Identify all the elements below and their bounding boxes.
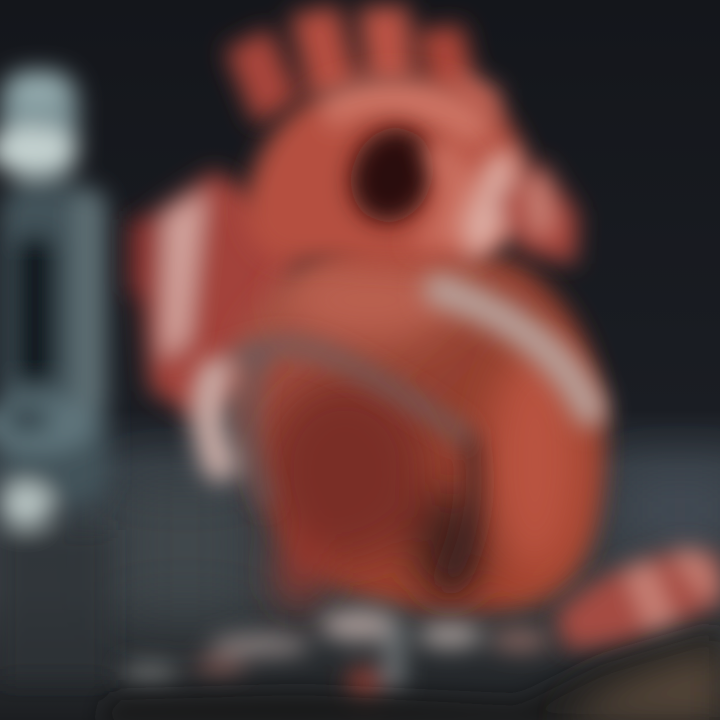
lower right vessels <box>555 548 720 648</box>
main ventricle body <box>234 242 604 610</box>
pale grey tissue bands <box>208 290 590 580</box>
scattered fragments at base <box>120 609 550 705</box>
bottle <box>0 70 110 680</box>
back vessels at top <box>225 5 500 130</box>
right vessels <box>460 150 578 265</box>
body shading <box>265 260 580 606</box>
table surface glow <box>120 480 720 610</box>
vessel opening <box>338 116 446 234</box>
foreground dark base <box>100 630 720 720</box>
left chamber and vessels <box>130 170 300 420</box>
foreground beige surface <box>560 645 720 720</box>
aortic arch <box>245 75 528 266</box>
